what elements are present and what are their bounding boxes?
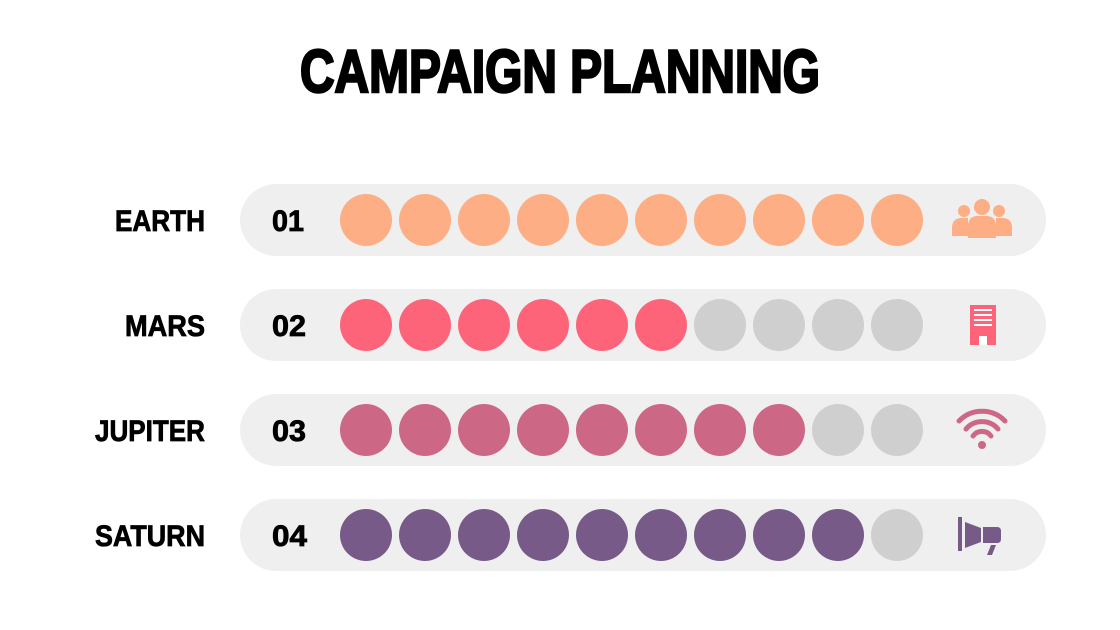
dots: earth [340, 194, 923, 246]
row: jupiter [95, 394, 1046, 466]
icon: wifi [959, 411, 1005, 448]
label: mars: MARS [125, 310, 205, 343]
icon: building [970, 305, 996, 345]
row: saturn [95, 499, 1046, 571]
number: 01: 01 [272, 205, 304, 238]
label: jupiter: JUPITER [95, 415, 205, 448]
icon: megaphone [958, 517, 1001, 555]
pill: earth [240, 184, 1046, 256]
number: 02: 02 [272, 310, 306, 343]
dots: saturn [340, 509, 923, 561]
icon: people [952, 199, 1012, 238]
label: saturn: SATURN [95, 520, 205, 553]
pill: saturn [240, 499, 1046, 571]
label: earth: EARTH [115, 205, 205, 238]
pill: mars [240, 289, 1046, 361]
dots: mars [340, 299, 923, 351]
row: earth [115, 184, 1046, 256]
number: 04: 04 [272, 520, 307, 553]
number: 03: 03 [272, 415, 306, 448]
row: mars [125, 289, 1046, 361]
dots: jupiter [340, 404, 923, 456]
pill: jupiter [240, 394, 1046, 466]
title: CAMPAIGN PLANNING [300, 38, 820, 105]
